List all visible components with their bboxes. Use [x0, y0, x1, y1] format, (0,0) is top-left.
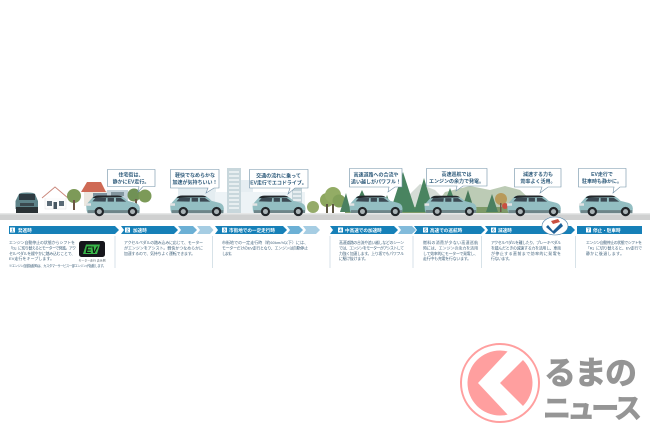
- step 1 header: 発進時: [18, 227, 32, 234]
- bubble 2: 軽快でなめらかな: [175, 172, 215, 179]
- step 5 header: 5: [424, 228, 427, 233]
- step 4 text: 力強く加速します。上り坂でもパワフル: [339, 251, 404, 256]
- step 2 header: 加速時: [133, 227, 147, 234]
- watermark wordmark: ニュース: [543, 393, 642, 424]
- icon: EV indicator: [78, 241, 106, 262]
- step 2 text: アクセルペダルの踏み込みに応じて、モーター: [124, 240, 203, 245]
- bubble 7: [578, 168, 626, 193]
- city buildings: [227, 168, 302, 213]
- watermark wordmark: [543, 355, 642, 424]
- step 5 text: して効率的にモーターで発電し、: [423, 251, 478, 256]
- icon: EV indicator: EV: [85, 245, 98, 255]
- step 5 text: 時には、エンジンの余力を活用: [423, 245, 478, 250]
- step 5 header: 高速での巡航時: [430, 227, 463, 234]
- bubble 2: [170, 170, 219, 193]
- icon: EV indicator: モーター走行 表示例: [78, 258, 106, 262]
- step 1 text: 「D」に切り替えるとモーターで発進。アク: [9, 245, 76, 250]
- step 6 header: 6: [492, 228, 495, 233]
- step 2 header: 2: [126, 228, 129, 233]
- step 5 text: 走行中も充電を行ないます。: [423, 256, 471, 261]
- step 6 text: が停止する直前まで効率的に発電を: [491, 251, 561, 256]
- step 3 text: [222, 240, 308, 256]
- step 3 text: します。: [222, 251, 234, 256]
- step 7 text: 「R」に切り替えると、EV走行で: [586, 245, 642, 250]
- cars: [86, 195, 633, 216]
- step 4 text: [339, 240, 404, 261]
- step 3 text: 市街地での一定走行時（約60km/h以下）には、: [222, 240, 308, 245]
- step 2 text: 加速するので、気持ちよく運転できます。: [124, 251, 195, 256]
- red-roof buildings and trees: [67, 182, 152, 211]
- step 7 header: 7: [587, 228, 590, 233]
- step 4 header: 4: [339, 228, 342, 233]
- step 6 text: を踏んだときの減速する力を活用し、車両: [491, 245, 561, 250]
- step 6 header: [485, 226, 575, 234]
- step 2 header: [121, 226, 214, 234]
- step 1 header: [9, 226, 119, 234]
- bubble 7: EV走行で: [591, 171, 613, 178]
- house: [42, 187, 68, 209]
- step 3 text: モーターだけのEV走行となり、エンジンは自動停止: [222, 245, 308, 250]
- step 1 header: 1: [11, 228, 14, 233]
- bubble 4: 高速道路への合流や: [353, 172, 399, 178]
- step 5 text: [423, 240, 478, 261]
- trees mid: [307, 172, 508, 213]
- step 7 header: [577, 226, 642, 234]
- bubble 6: 効率よく活用。: [520, 178, 556, 185]
- step 7 text: 静かに後退します。: [586, 251, 624, 256]
- step 6 text: 行ないます。: [491, 256, 512, 261]
- step 1 text: EV走行をキープします。: [9, 256, 54, 261]
- bubble 1: [108, 170, 155, 192]
- bubble 3: 交通の流れに乗って: [256, 172, 301, 180]
- bubble 1: 静かにEV走行。: [113, 178, 149, 186]
- step 3 header: 市街地での一定走行時: [229, 227, 275, 234]
- step 7 header: 停止・駐車時: [593, 227, 621, 234]
- bubble 5: エンジンの余力で発電。: [429, 178, 484, 185]
- step 4 text: では、エンジンをモーターがアシストして: [339, 245, 404, 250]
- step 5 text: 燃料の消費が少ない高速巡航: [423, 240, 478, 245]
- bubble 6: [514, 168, 561, 193]
- bubble 5: [426, 168, 487, 191]
- bubble 4: 追い越しがパワフル！: [351, 178, 401, 186]
- watermark logo mark: [461, 344, 539, 422]
- bubble 4: [350, 168, 402, 192]
- background scenery: [178, 180, 550, 213]
- step 6 text: アクセルペダルを離したり、ブレーキペダル: [491, 240, 561, 245]
- step 6 header: 減速時: [498, 227, 512, 234]
- step 3 header: 3: [223, 228, 226, 233]
- step 7 text: エンジン自動停止の状態でシフトを: [586, 240, 642, 245]
- step 4 text: 高速道路の合流や追い越しなどのシーン: [339, 240, 404, 245]
- bubble 7: 駐車時も静かに。: [582, 178, 622, 185]
- step 5 header: [414, 226, 485, 234]
- bubble 6: 減速する力も: [523, 171, 553, 178]
- step 1 text: [9, 240, 106, 268]
- step 7 text: [586, 240, 642, 256]
- step 6 text: [491, 240, 561, 261]
- bubble 3: [250, 170, 308, 194]
- step 1 text: ※エンジン自動始動時は、カスタマーサービス一部エンジンが始動します。: [9, 263, 106, 268]
- road: [0, 213, 650, 220]
- bubble 5: 高速巡航では: [441, 171, 472, 178]
- step 2 text: [124, 240, 203, 256]
- icon: regeneration: [542, 217, 568, 235]
- step 2 text: がエンジンをアシスト。軽快かつなめらかに: [124, 245, 203, 250]
- step 1 text: エンジン自動停止の状態からシフトを: [9, 240, 75, 245]
- bubble 3: EV走行でエコドライブ。: [250, 180, 307, 186]
- step 1 text: セルペダルを緩やかに踏み込むことで、: [9, 251, 75, 256]
- bubble 1: 住宅街は、: [118, 172, 144, 178]
- watermark wordmark: るまの: [544, 355, 637, 391]
- step 4 text: に駆け抜けます。: [339, 256, 368, 261]
- step 4 header: [330, 226, 416, 234]
- step 4 header: 中高速での加速時: [345, 227, 382, 234]
- step 3 header: [215, 226, 320, 234]
- front view car: [16, 192, 38, 213]
- bubble 2: 加速が気持ちいい！: [172, 179, 218, 186]
